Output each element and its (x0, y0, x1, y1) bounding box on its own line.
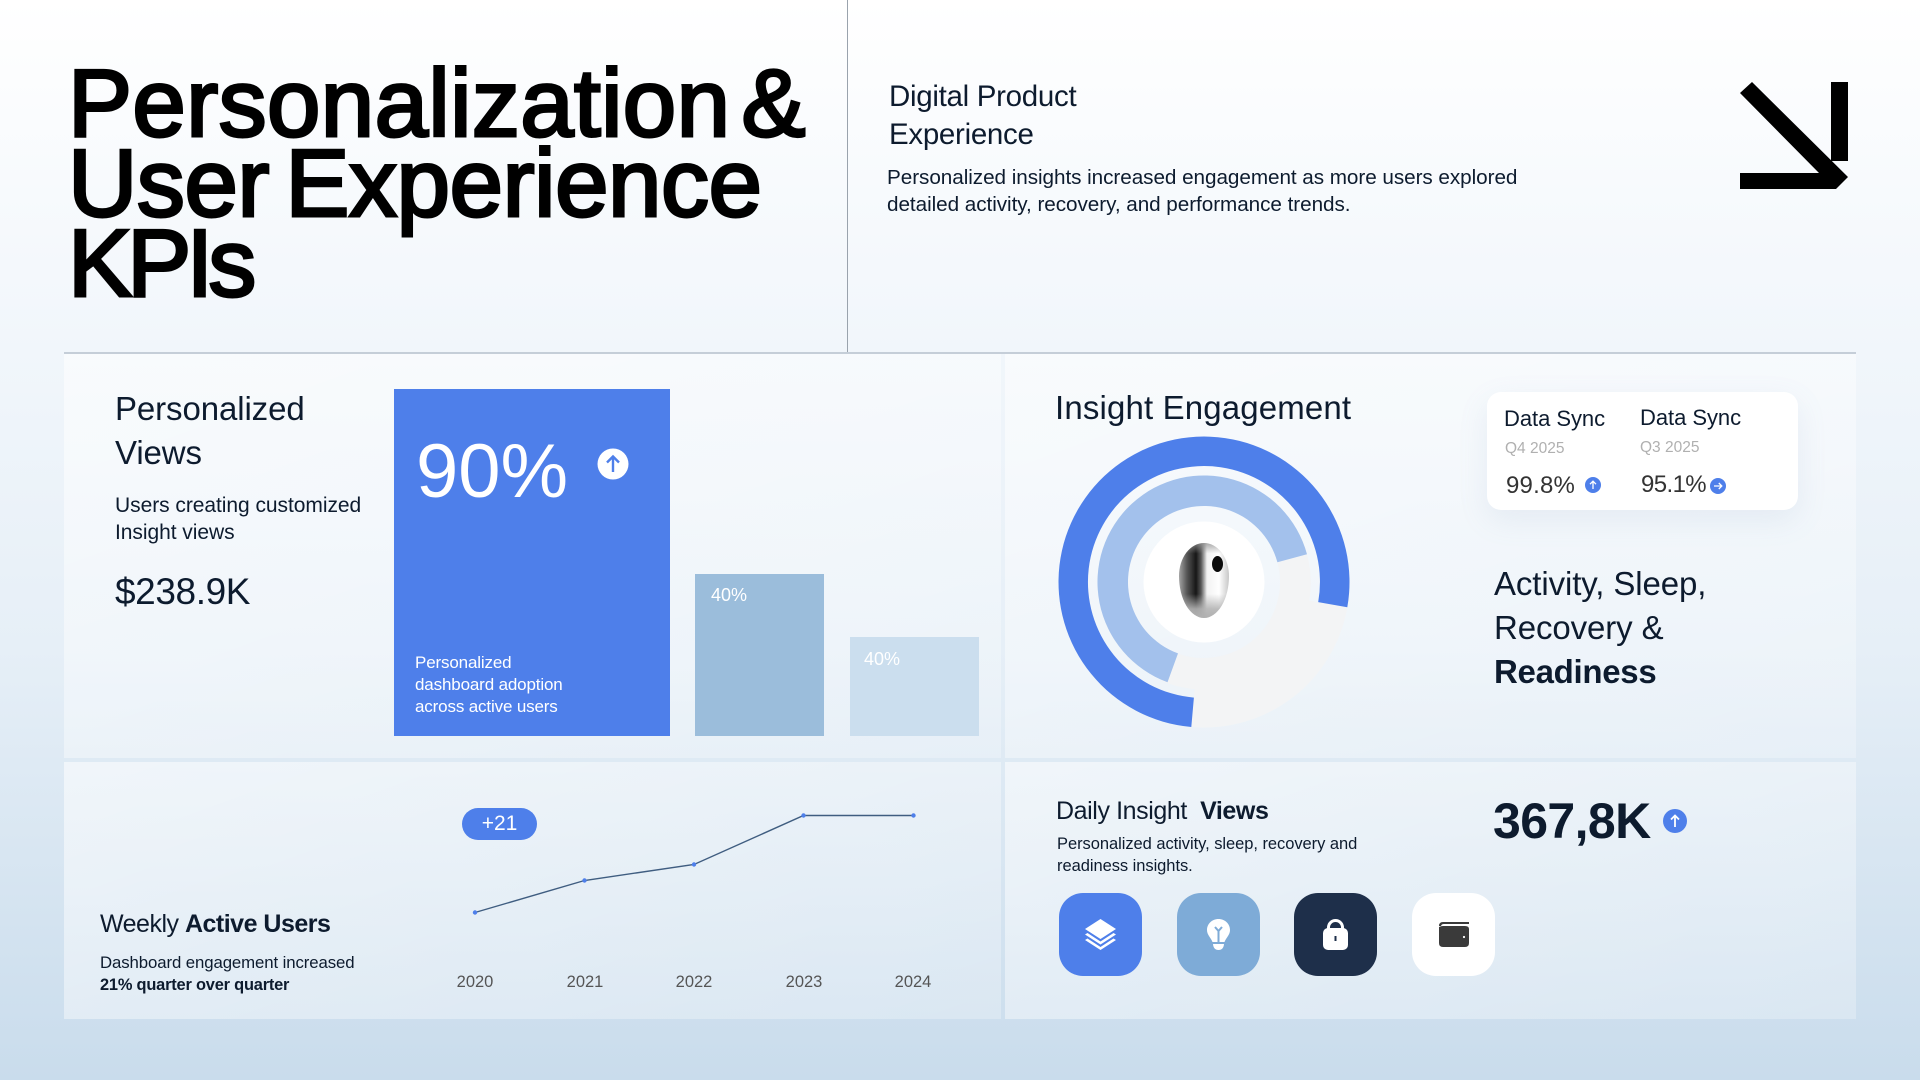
description: detailed activity, recovery, and performance trends. (887, 193, 1350, 216)
line chart (457, 813, 931, 991)
icon: up circle (1663, 809, 1687, 833)
bar caption (415, 653, 563, 716)
line chart: 2020 (457, 973, 493, 991)
text: activity sleep recovery readiness: Recovery & (1494, 609, 1664, 646)
panel: insight engagement (1005, 354, 1856, 758)
panel: personalized views (64, 354, 1001, 758)
icon: bulb (1207, 919, 1230, 950)
icon: layers (1085, 919, 1116, 950)
label: 40% (864, 649, 900, 669)
icon: wallet (1439, 922, 1469, 947)
badge: +21 (462, 808, 537, 840)
bar: 40 percent mid (695, 574, 824, 736)
card label left: Data Sync (1504, 406, 1605, 431)
divider: horizontal (64, 352, 1856, 354)
quarter right: Q3 2025 (1640, 439, 1699, 456)
text: users creating: Insight views (115, 521, 235, 544)
description (887, 166, 1517, 216)
icon: metallic pebble (1179, 543, 1229, 618)
icon tile: layers (1059, 893, 1142, 976)
bar caption: dashboard adoption (415, 675, 563, 694)
line chart: 2021 (567, 973, 603, 991)
bar caption: across active users (415, 697, 558, 716)
icon tile: wallet (1412, 893, 1495, 976)
bar: 90 percent (394, 389, 670, 736)
label: 40% (711, 585, 747, 605)
title: User Experience (68, 130, 762, 237)
description: Personalized insights increased engagement as more users explored (887, 166, 1517, 189)
text: activity sleep recovery readiness (1494, 565, 1706, 690)
value left: 99.8% (1506, 472, 1575, 499)
title: Personalization & (68, 50, 806, 157)
divider: vertical (847, 0, 848, 352)
text: dashboard engagement (100, 953, 354, 994)
heading: weekly active users: Weekly Active Users (100, 910, 330, 938)
icon tile: lock (1294, 893, 1377, 976)
subtitle: Experience (889, 118, 1034, 150)
line chart: 2024 (895, 973, 931, 991)
value: 367,8K: 367,8K (1493, 793, 1651, 849)
text: users creating: Users creating customized (115, 494, 361, 517)
panel: weekly active users (64, 762, 1001, 1019)
icon: arrow (1740, 82, 1848, 189)
value right: 95.1% (1641, 471, 1706, 498)
title (68, 50, 806, 317)
card: data sync (1487, 392, 1798, 510)
quarter left: Q4 2025 (1505, 440, 1564, 457)
text: dashboard engagement: 21% quarter over quarter (100, 976, 289, 994)
line chart: 2022 (676, 973, 712, 991)
subtitle: Digital Product (889, 80, 1076, 113)
icon: lock (1323, 919, 1348, 950)
icon: right (1710, 478, 1726, 494)
text: activity sleep recovery readiness: Activity, Sleep, (1494, 565, 1706, 602)
gray track (1191, 595, 1347, 728)
bar: 40 percent light (850, 637, 979, 736)
text: users creating (115, 494, 361, 544)
text: personalized activity (1057, 835, 1357, 875)
text: activity sleep recovery readiness: Readiness (1494, 653, 1656, 690)
line chart: 2023 (786, 973, 822, 991)
heading: insight engagement: Insight Engagement (1055, 389, 1351, 426)
heading: personalized views (115, 390, 305, 471)
heading: personalized views: Personalized (115, 390, 305, 427)
icon tile: bulb (1177, 893, 1260, 976)
heading: personalized views: Views (115, 434, 202, 471)
panel: daily insight views (1005, 762, 1856, 1019)
pebble dot (1212, 556, 1223, 572)
value: 90%: 90% (416, 429, 568, 514)
donut chart (1058, 436, 1350, 727)
badge: +21: +21 (482, 812, 517, 835)
subtitle (889, 80, 1076, 150)
text: personalized activity: Personalized activity, sleep, recovery and (1057, 835, 1357, 853)
text: personalized activity: readiness insights. (1057, 857, 1193, 875)
title: KPIs (68, 210, 252, 317)
icon: up (1585, 477, 1601, 493)
heading: daily insight views: Daily Insight Views (1056, 797, 1268, 825)
middle ring (1097, 475, 1307, 682)
icon: up arrow (598, 448, 628, 480)
bar caption: Personalized (415, 653, 511, 672)
center circle (1144, 522, 1264, 642)
outer ring (1059, 437, 1350, 727)
value: revenue: $238.9K (115, 571, 250, 612)
card label right: Data Sync (1640, 405, 1741, 430)
text: dashboard engagement: Dashboard engagement increased (100, 953, 354, 972)
